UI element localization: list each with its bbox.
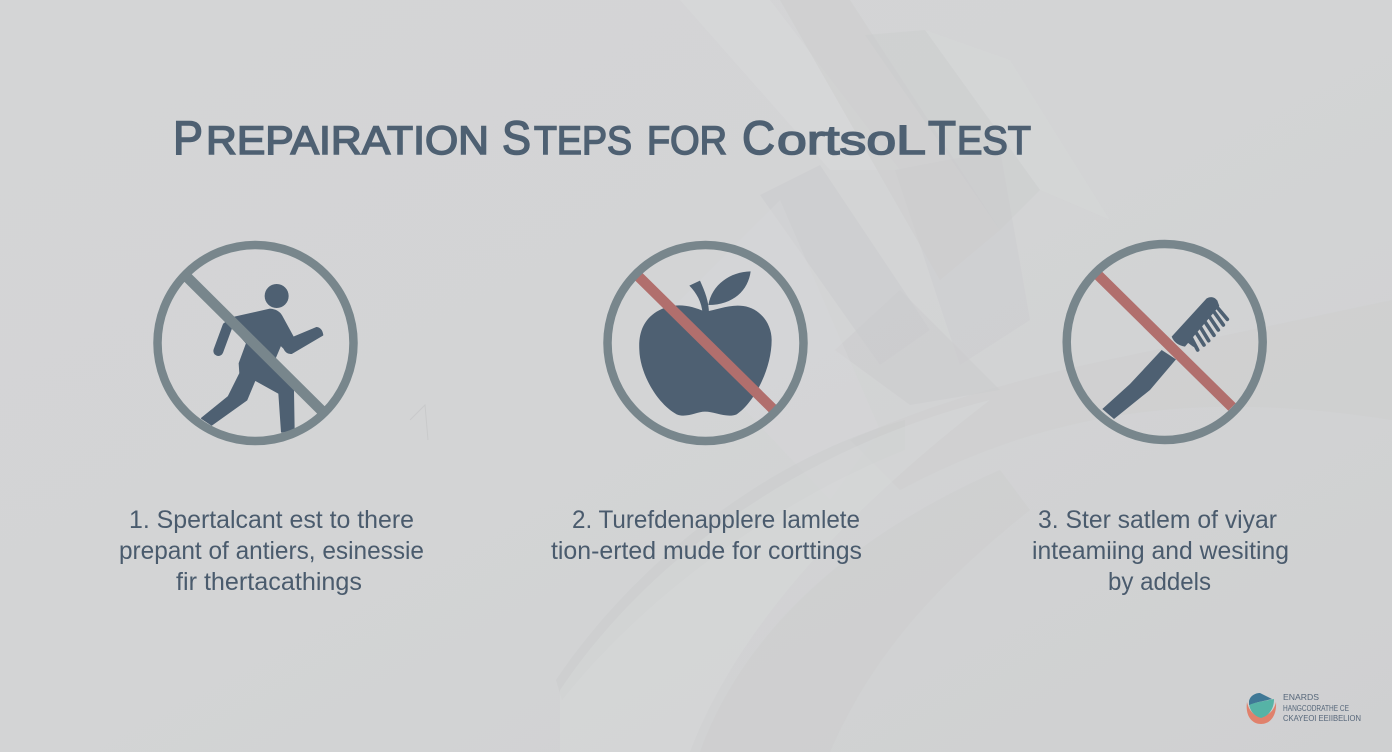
title: C [742,111,775,164]
step 3 text: inteamiing and wesiting [1032,537,1289,565]
toothbrush [1102,297,1227,419]
step 1 text: prepant of antiers, esinessie [119,537,424,565]
prohibition slash [637,275,775,411]
title [173,111,1031,164]
step 3: no toothbrush icon [1067,244,1263,440]
title: ortsoL [777,117,926,163]
step 2 text: tion-erted mude for corttings [551,537,862,565]
step 1 text: fir thertacathings [176,568,362,596]
title: EST [957,119,1031,163]
apple [639,271,772,416]
step 2: no food icon [608,245,804,441]
logo text [1283,692,1361,723]
title: TEPS [534,119,632,163]
prohibition slash [185,275,322,411]
prohibition ring [608,245,804,441]
logo mark [1247,693,1276,724]
step 1 text: 1. Spertalcant est to there [129,506,414,534]
step 3 text: 3. Ster satlem of viyar [1038,506,1277,534]
logo text: HANGCODRATHE CE [1283,703,1349,713]
prohibition slash [1098,275,1232,407]
title: P [173,111,203,164]
step 2 text: 2. Turefdenapplere lamlete [572,506,860,534]
runner figure [202,284,323,432]
logo text: CKAYEOI EEIIBELION [1283,713,1361,723]
prohibition ring [1067,244,1263,440]
prohibition ring [158,245,354,441]
logo text: ENARDS [1283,692,1319,702]
step 1 text [119,506,424,596]
title: FOR [647,119,727,163]
step 3 text [1032,506,1289,596]
step 3 text: by addels [1108,568,1211,596]
step 1: no running icon [158,245,354,441]
title: S [502,111,531,164]
title: REPAIRATION [206,119,489,163]
logo [1247,692,1361,724]
step 2 text [551,506,862,565]
title: T [928,111,956,164]
